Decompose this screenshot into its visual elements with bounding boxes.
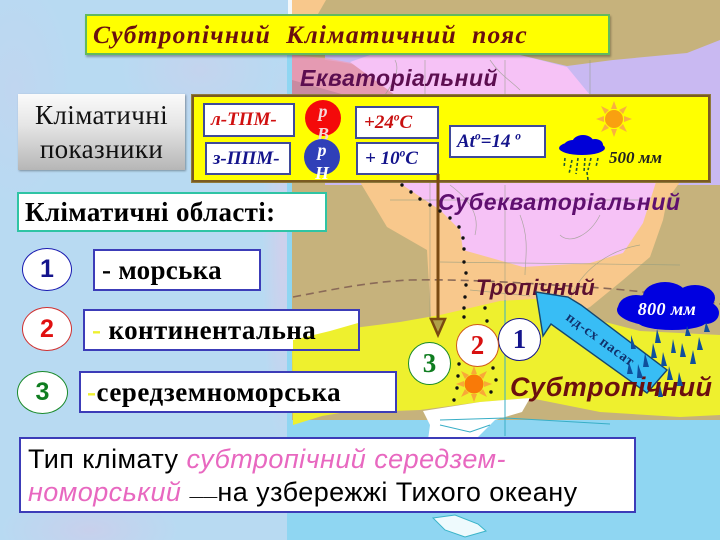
arrow: south-east trade wind xyxy=(535,291,668,394)
textured background xyxy=(0,0,292,540)
map marker 3: 3 xyxy=(423,348,436,378)
belt label: tropical: Тропічний xyxy=(476,275,596,300)
box: winter temperature: + 10оС xyxy=(365,147,418,168)
icon: high pressure xyxy=(305,100,341,136)
list item: marine xyxy=(93,249,261,291)
map marker 1: 1 xyxy=(513,324,526,354)
box: winter air mass xyxy=(205,142,291,175)
map marker 1 xyxy=(498,318,541,361)
list item box: continental xyxy=(83,309,360,351)
list item: marine: - морська xyxy=(102,254,222,284)
map marker 2 xyxy=(456,324,499,367)
belt label: subequatorial: Субекваторіальний xyxy=(438,189,681,215)
heading: climate indicators: Кліматичні xyxy=(35,100,168,130)
oval 1: 1 xyxy=(40,255,54,283)
box: summer air mass xyxy=(203,103,295,137)
icon: rain cloud 800 mm xyxy=(617,282,719,397)
box: winter temperature xyxy=(356,142,439,175)
text block: climate type xyxy=(19,437,636,513)
box: temperature amplitude: Аtо=14 о xyxy=(457,130,521,152)
box: summer air mass: л-ТПМ- xyxy=(211,109,277,130)
oval 2: 2 xyxy=(40,314,54,342)
panel: climate data xyxy=(192,95,710,182)
list item: mediterranean xyxy=(79,371,397,413)
box: summer temperature: +24оС xyxy=(364,111,412,132)
box: winter air mass: з-ППМ- xyxy=(213,148,280,168)
belt label: subtropical: Субтропічний xyxy=(510,372,712,402)
text block: climate type: Тип клімату субтропічний середзем- xyxy=(28,444,506,474)
box: temperature amplitude xyxy=(449,125,546,158)
arrow: brown descending arrow xyxy=(429,174,447,338)
icon: low pressure: Н xyxy=(315,163,329,183)
oval 1 xyxy=(22,248,72,291)
icon: rain cloud 800 mm: 800 мм xyxy=(638,299,696,319)
list item: mediterranean: -середземноморська xyxy=(87,376,341,406)
icon: orange sun xyxy=(456,366,492,402)
icon: high pressure: В xyxy=(317,124,329,144)
text: annual rainfall: 500 мм xyxy=(609,148,662,167)
yellow band across continental box xyxy=(293,323,358,349)
icon: low pressure xyxy=(304,139,340,175)
map marker 3 xyxy=(408,342,451,385)
heading: climate regions xyxy=(17,192,327,232)
title: Субтропічний Кліматичний пояс xyxy=(93,20,528,49)
oval 3 xyxy=(17,371,68,414)
text block: climate type: номорський ——на узбережжі Тихого океану xyxy=(28,477,578,507)
list text: continental: - континентальна xyxy=(92,315,316,345)
oval 2 xyxy=(22,307,72,351)
map marker 2: 2 xyxy=(471,330,484,360)
heading: climate indicators: показники xyxy=(40,134,163,164)
dotted climate boundary xyxy=(400,183,498,402)
heading: climate indicators xyxy=(18,94,185,170)
oval 3: 3 xyxy=(36,378,49,406)
belt label: equatorial: Екваторіальний xyxy=(300,65,498,91)
icon: sun and rain cloud xyxy=(559,101,632,180)
icon: high pressure: р xyxy=(318,101,328,121)
title xyxy=(85,14,610,55)
box: summer temperature xyxy=(355,106,439,139)
icon: low pressure: р xyxy=(318,140,326,160)
arrow: south-east trade wind: пд-сх пасат xyxy=(563,310,637,370)
heading: climate regions: Кліматичні області: xyxy=(25,196,275,226)
